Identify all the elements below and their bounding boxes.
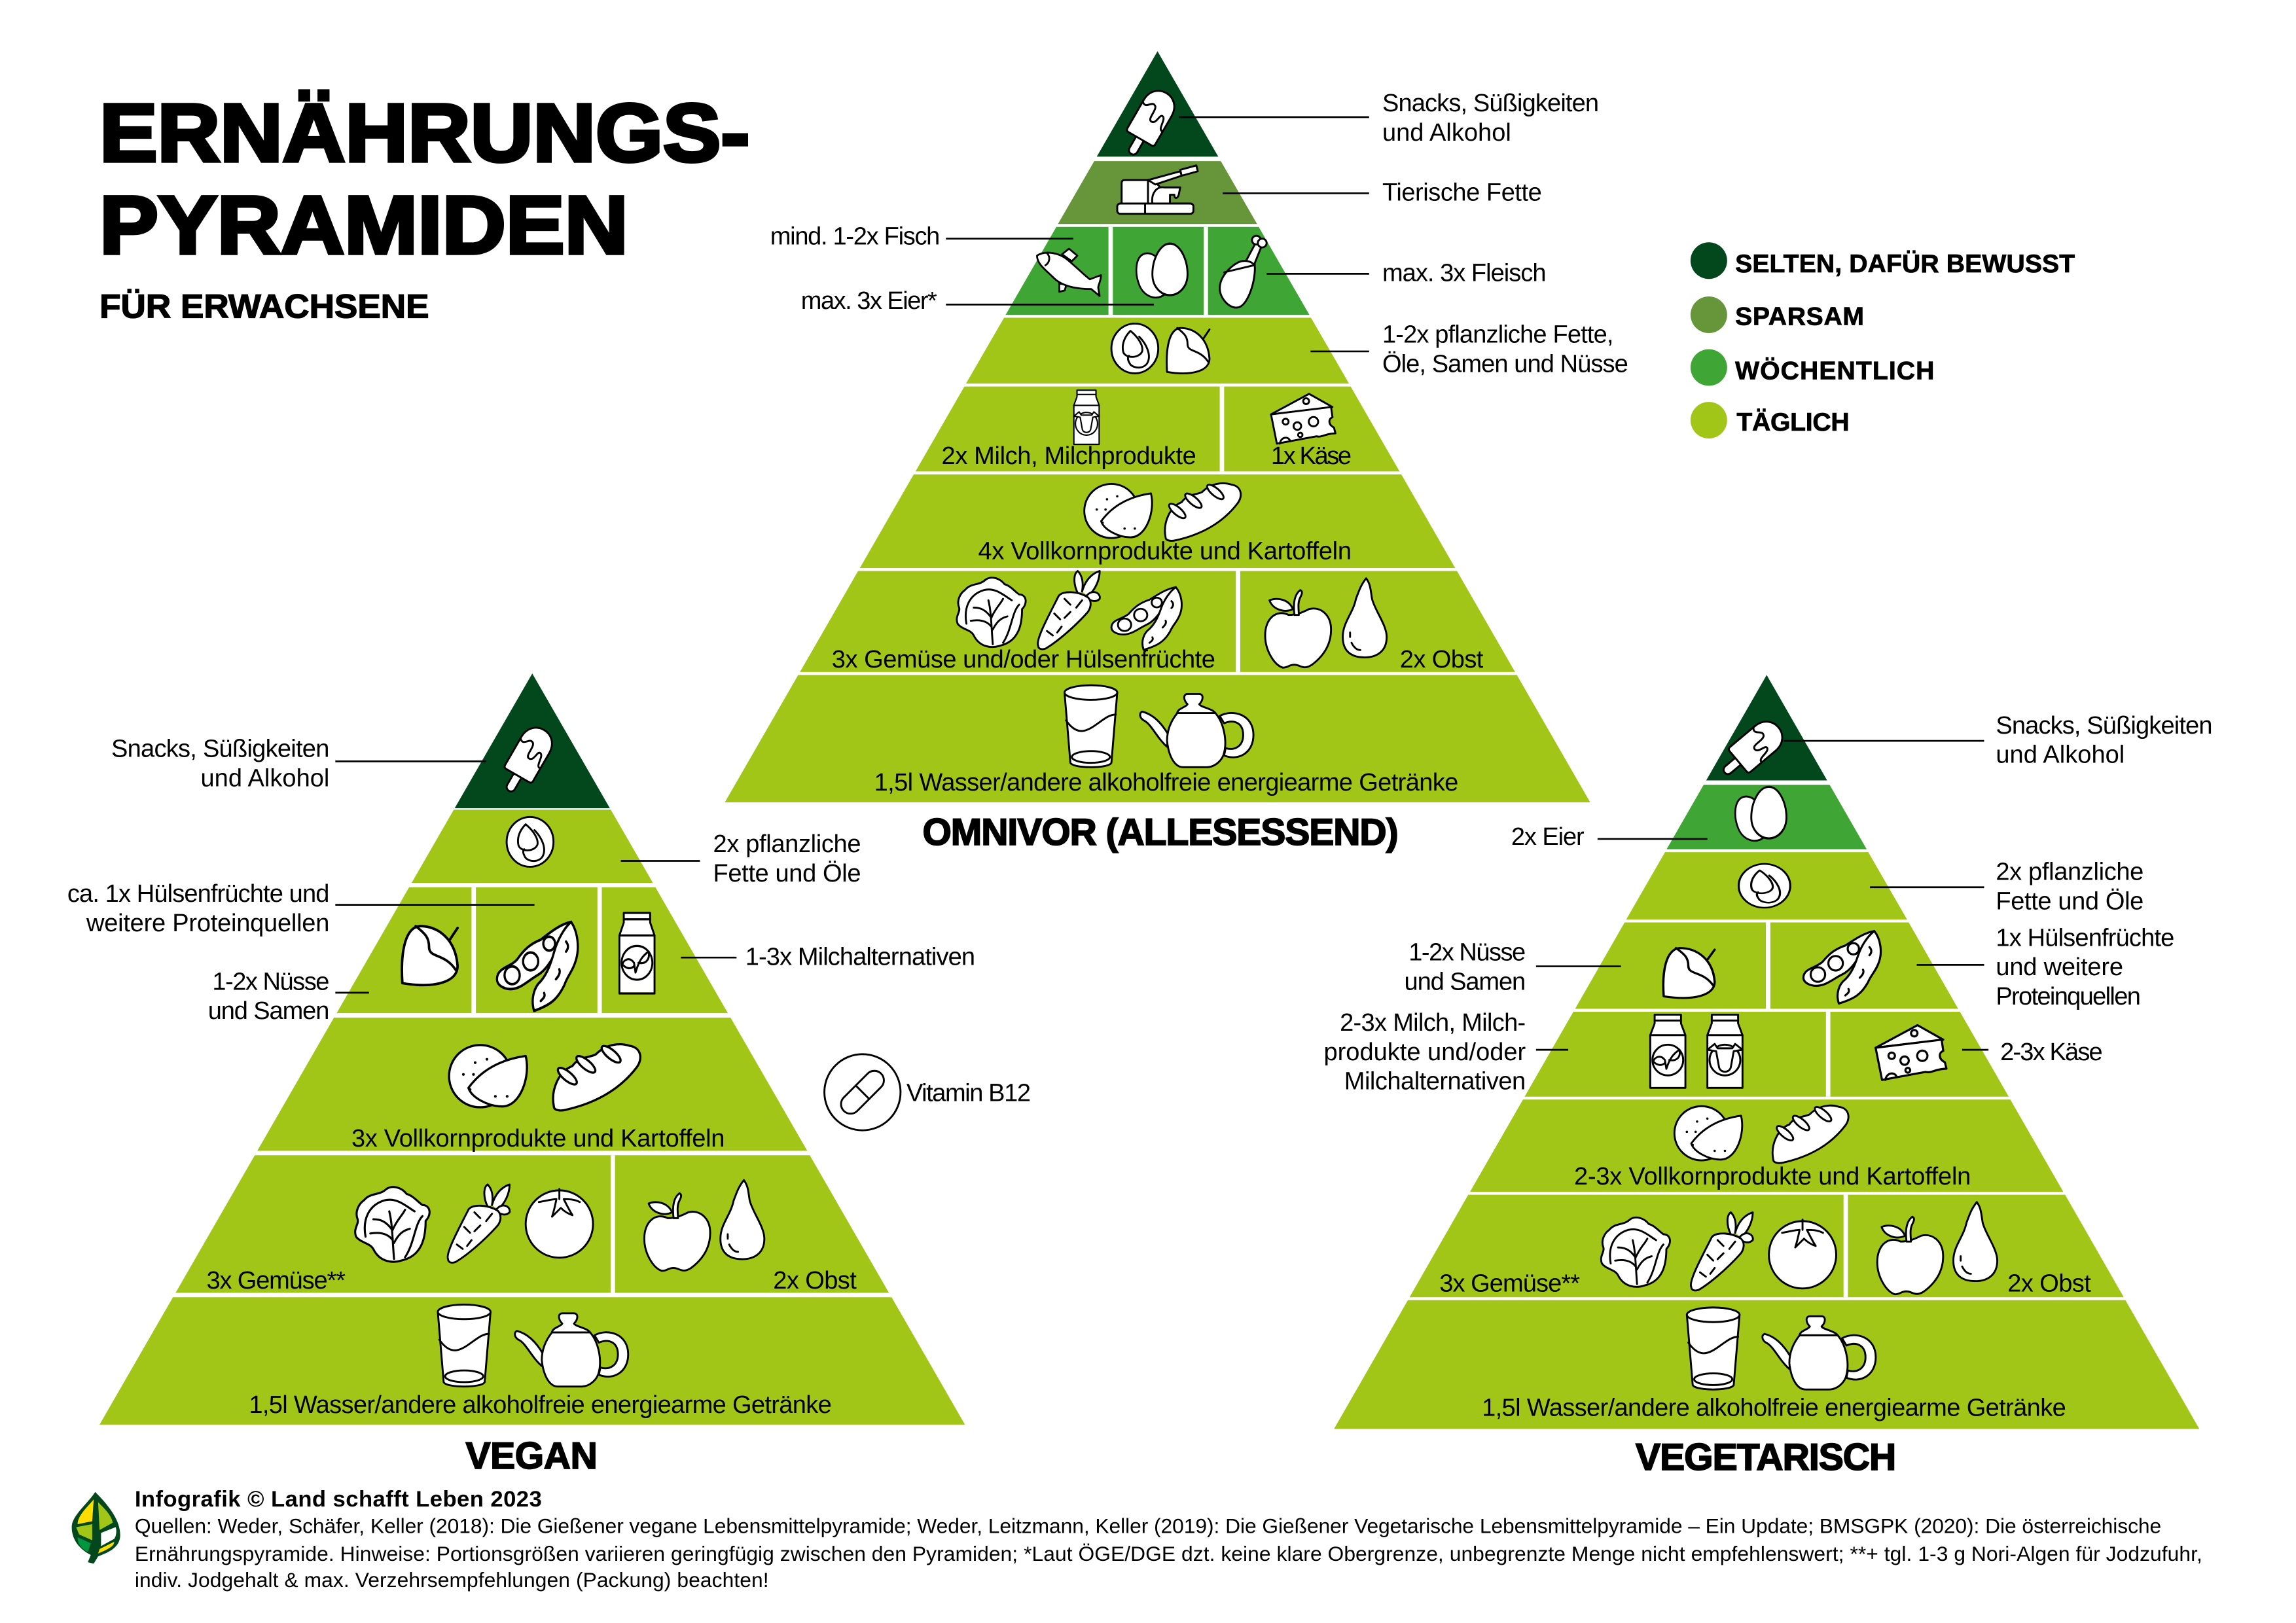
legend item: täglich: TÄGLICH: [1736, 408, 1850, 437]
icon: cheese: [1876, 1026, 1946, 1080]
callouts omnivor: Snacks, Süßigkeiten: [1382, 90, 1599, 117]
icon: hazelnut: [402, 926, 457, 985]
panel: omnivor pyramid: [725, 51, 1628, 853]
labels inside omnivor: 4x Vollkornprodukte und Kartoffeln: [978, 538, 1352, 565]
tier: pflanzliche Fette: [412, 810, 653, 883]
tier: Milch, Käse: [916, 387, 1399, 471]
icon: bread: [1772, 1105, 1848, 1163]
icon: almonds: [1111, 323, 1158, 374]
heading: vegan: VEGAN: [465, 1435, 598, 1477]
callouts vegan: weitere Proteinquellen: [86, 910, 329, 937]
icon: pear: [1343, 579, 1387, 658]
callouts omnivor: 1-2x pflanzliche Fette,: [1382, 321, 1613, 349]
panel: vegan pyramid: [67, 673, 1031, 1477]
callouts omnivor: Öle, Samen und Nüsse: [1382, 350, 1628, 378]
callouts omnivor: max. 3x Fleisch: [1382, 260, 1547, 287]
tier: Vollkorn: [257, 1018, 807, 1150]
tier: Vollkorn: [1470, 1099, 2064, 1192]
callouts omnivor: max. 3x Eier*: [801, 287, 937, 315]
legend item: selten: SELTEN, DAFÜR BEWUSST: [1735, 250, 2075, 278]
icon: plant milk: [619, 913, 655, 993]
icon: pear: [721, 1180, 764, 1259]
icon: almonds: [1739, 864, 1790, 908]
callouts vegan: ca. 1x Hülsenfrüchte und: [67, 880, 329, 908]
title: [99, 87, 749, 271]
icon: bread: [1165, 482, 1241, 541]
tier: snacks: [1097, 51, 1218, 156]
icon: bread: [553, 1043, 640, 1111]
tier: Milch, Käse: [1524, 1012, 2009, 1097]
label: vitamin B12: Vitamin B12: [906, 1079, 1031, 1107]
callouts vegan: 1-3x Milchalternativen: [745, 943, 975, 971]
icon: ice: [495, 722, 558, 799]
icon: pear: [1953, 1202, 1998, 1281]
icon: chicken leg: [1220, 236, 1266, 308]
callouts omnivor: Tierische Fette: [1382, 179, 1542, 207]
icon: carrot: [1691, 1212, 1753, 1291]
icon: eggs: [1728, 787, 1786, 846]
tier: Gemüse, Obst: [175, 1155, 889, 1293]
icon: tomato: [526, 1189, 593, 1258]
tier: Gemüse, Obst: [1410, 1195, 2124, 1297]
tier: tierische Fette: [1058, 161, 1257, 224]
labels inside vegan: [206, 1125, 857, 1419]
callouts vegetarian: Proteinquellen: [1996, 983, 2141, 1010]
callouts vegan: und Alkohol: [201, 764, 329, 792]
icon: glass: [1687, 1308, 1740, 1389]
icon: carrot: [448, 1185, 510, 1262]
labels inside omnivor: [832, 442, 1484, 796]
labels inside vegetarian: 1,5l Wasser/andere alkoholfreie energiearme Getränke: [1482, 1394, 2066, 1421]
icon: potato: [1085, 484, 1152, 538]
icon: teapot: [515, 1313, 628, 1387]
callouts vegetarian: 2-3x Milch, Milch-: [1340, 1009, 1526, 1037]
footer sources: Ernährungspyramide. Hinweise: Portionsgrößen variieren geringfügig zwischen den Pyramiden; *Laut ÖGE/DGE dzt. keine klare Obergrenze, unbegrenzte Menge nicht empfehlenswert; **+ tgl. 1-3 g Nori-Algen für Jodzufuhr,: [135, 1542, 2202, 1565]
legend: [1691, 242, 2075, 438]
icon: cabbage: [957, 578, 1026, 647]
labels inside vegetarian: 2-3x Vollkornprodukte und Kartoffeln: [1574, 1163, 1971, 1190]
callouts vegan: und Samen: [208, 997, 329, 1025]
icon: almonds: [507, 817, 554, 866]
callouts vegetarian: [1323, 712, 2212, 1096]
icon: plant milk: [1650, 1014, 1685, 1088]
legend item: wöchentlich: WÖCHENTLICH: [1735, 357, 1934, 385]
logo: leaf: [72, 1492, 120, 1563]
heading: omnivor: OMNIVOR (ALLESESSEND): [922, 812, 1399, 853]
icon: beans: [1111, 587, 1181, 650]
labels inside vegan: 1,5l Wasser/andere alkoholfreie energiearme Getränke: [249, 1391, 832, 1419]
icon: cabbage: [1601, 1217, 1670, 1287]
callouts vegetarian: 1x Hülsenfrüchte: [1996, 924, 2174, 952]
icon: beans: [497, 922, 578, 1011]
icon: apple: [1877, 1217, 1943, 1294]
icon: hazelnut: [1663, 948, 1715, 998]
heading: vegetarisch: VEGETARISCH: [1636, 1436, 1896, 1478]
icon: eggs: [1129, 243, 1187, 302]
callouts vegan: 1-2x Nüsse: [212, 968, 329, 995]
legend item: täglich: [1691, 402, 1850, 438]
footer sources: indiv. Jodgehalt & max. Verzehrsempfehlungen (Packung) beachten!: [135, 1568, 769, 1592]
callouts vegetarian: 1-2x Nüsse: [1408, 939, 1526, 967]
icon: teapot: [1763, 1316, 1876, 1389]
callouts vegan: 2x pflanzliche: [713, 830, 861, 858]
icon: ice: [1117, 85, 1180, 162]
labels inside omnivor: 2x Obst: [1400, 646, 1484, 673]
icon: apple: [1265, 590, 1331, 668]
tier: Fisch, Eier, Fleisch: [1006, 227, 1310, 315]
tier: Vollkorn: [860, 474, 1455, 568]
callouts vegetarian: produkte und/oder: [1323, 1039, 1526, 1066]
icon: teapot: [1140, 694, 1253, 767]
icon: milk carton: [1074, 390, 1099, 444]
panel: vegetarian pyramid: [1323, 675, 2212, 1478]
callouts vegan: Fette und Öle: [713, 860, 861, 887]
icon: vitamin B12 pill: [825, 1054, 901, 1130]
callouts vegetarian: 2x pflanzliche: [1996, 859, 2144, 886]
legend item: sparsam: [1691, 296, 1864, 333]
tier: Wasser: [1334, 1300, 2199, 1429]
labels inside vegetarian: [1439, 1163, 2091, 1421]
tier: Gemüse, Obst: [800, 571, 1515, 672]
icon: butter: [1117, 166, 1198, 214]
tier: Nüsse, Hülsenfrüchte: [1575, 922, 1958, 1008]
callouts vegetarian: und weitere: [1996, 954, 2123, 981]
callouts vegetarian: Milchalternativen: [1344, 1068, 1526, 1096]
callouts vegetarian: 2-3x Käse: [2000, 1039, 2103, 1066]
callouts vegetarian: und Alkohol: [1996, 741, 2125, 769]
tier: pflanzliche Fette: [966, 317, 1349, 383]
footer sources: Quellen: Weder, Schäfer, Keller (2018): Die Gießener vegane Lebensmittelpyramide; Weder, Leitzmann, Keller (2019): Die Gießener Vegetarische Lebensmittelpyramide – Ein Update; BMSGPK (2020): Die österreichische: [135, 1514, 2161, 1537]
labels inside vegan: 3x Vollkornprodukte und Kartoffeln: [351, 1125, 725, 1152]
icon: beans: [1803, 931, 1881, 1003]
tier: pflanzliche Fette: [1626, 852, 1907, 919]
subtitle: FÜR ERWACHSENE: [99, 287, 429, 325]
labels inside vegetarian: 3x Gemüse**: [1439, 1270, 1580, 1297]
callouts vegetarian: Snacks, Süßigkeiten: [1996, 712, 2212, 740]
tier: Eier: [1666, 785, 1867, 849]
title: ERNÄHRUNGS-: [99, 87, 749, 179]
tier: Wasser: [99, 1297, 965, 1425]
callouts vegetarian: 2x Eier: [1511, 823, 1585, 851]
callouts vegetarian: und Samen: [1405, 968, 1526, 995]
labels inside vegetarian: 2x Obst: [2007, 1270, 2091, 1297]
labels inside omnivor: 3x Gemüse und/oder Hülsenfrüchte: [832, 646, 1215, 673]
callouts vegetarian: Fette und Öle: [1996, 887, 2144, 915]
callouts omnivor: [770, 90, 1628, 378]
tier: Nüsse, Hülsenfrüchte, Milchalternativen: [336, 887, 728, 1013]
icon: fish: [1037, 249, 1101, 296]
icon: glass: [438, 1304, 490, 1387]
title: PYRAMIDEN: [99, 179, 628, 271]
footer credit: Infografik © Land schafft Leben 2023: [135, 1487, 542, 1512]
callouts omnivor: mind. 1-2x Fisch: [770, 223, 940, 251]
icon: cow milk: [1708, 1014, 1742, 1088]
tier: snacks: [455, 673, 610, 808]
legend item: selten: [1691, 242, 2075, 279]
icon: cabbage: [355, 1187, 429, 1262]
icon: glass: [1064, 685, 1117, 767]
legend item: wöchentlich: [1691, 349, 1934, 386]
icon: potato: [449, 1045, 527, 1107]
callouts vegan: [67, 736, 975, 1025]
icon: apple: [644, 1193, 710, 1271]
icon: carrot: [1038, 571, 1100, 649]
icon: potato: [1674, 1106, 1742, 1160]
footer sources: [135, 1514, 2202, 1592]
labels inside vegan: 2x Obst: [773, 1267, 857, 1294]
icon: tomato: [1769, 1220, 1837, 1289]
callouts vegan: Snacks, Süßigkeiten: [111, 736, 329, 763]
labels inside omnivor: 1,5l Wasser/andere alkoholfreie energiearme Getränke: [874, 769, 1458, 796]
icon: cheese: [1271, 394, 1335, 444]
tier: snacks: [1706, 675, 1827, 780]
callouts omnivor: und Alkohol: [1382, 119, 1511, 147]
labels inside omnivor: 1x Käse: [1271, 442, 1352, 470]
tier: Wasser: [725, 675, 1590, 802]
icon: ice: [1714, 715, 1789, 785]
icon: hazelnut: [1167, 328, 1210, 373]
labels inside vegan: 3x Gemüse**: [206, 1267, 346, 1294]
labels inside omnivor: 2x Milch, Milchprodukte: [942, 442, 1196, 470]
legend item: sparsam: SPARSAM: [1735, 303, 1864, 331]
